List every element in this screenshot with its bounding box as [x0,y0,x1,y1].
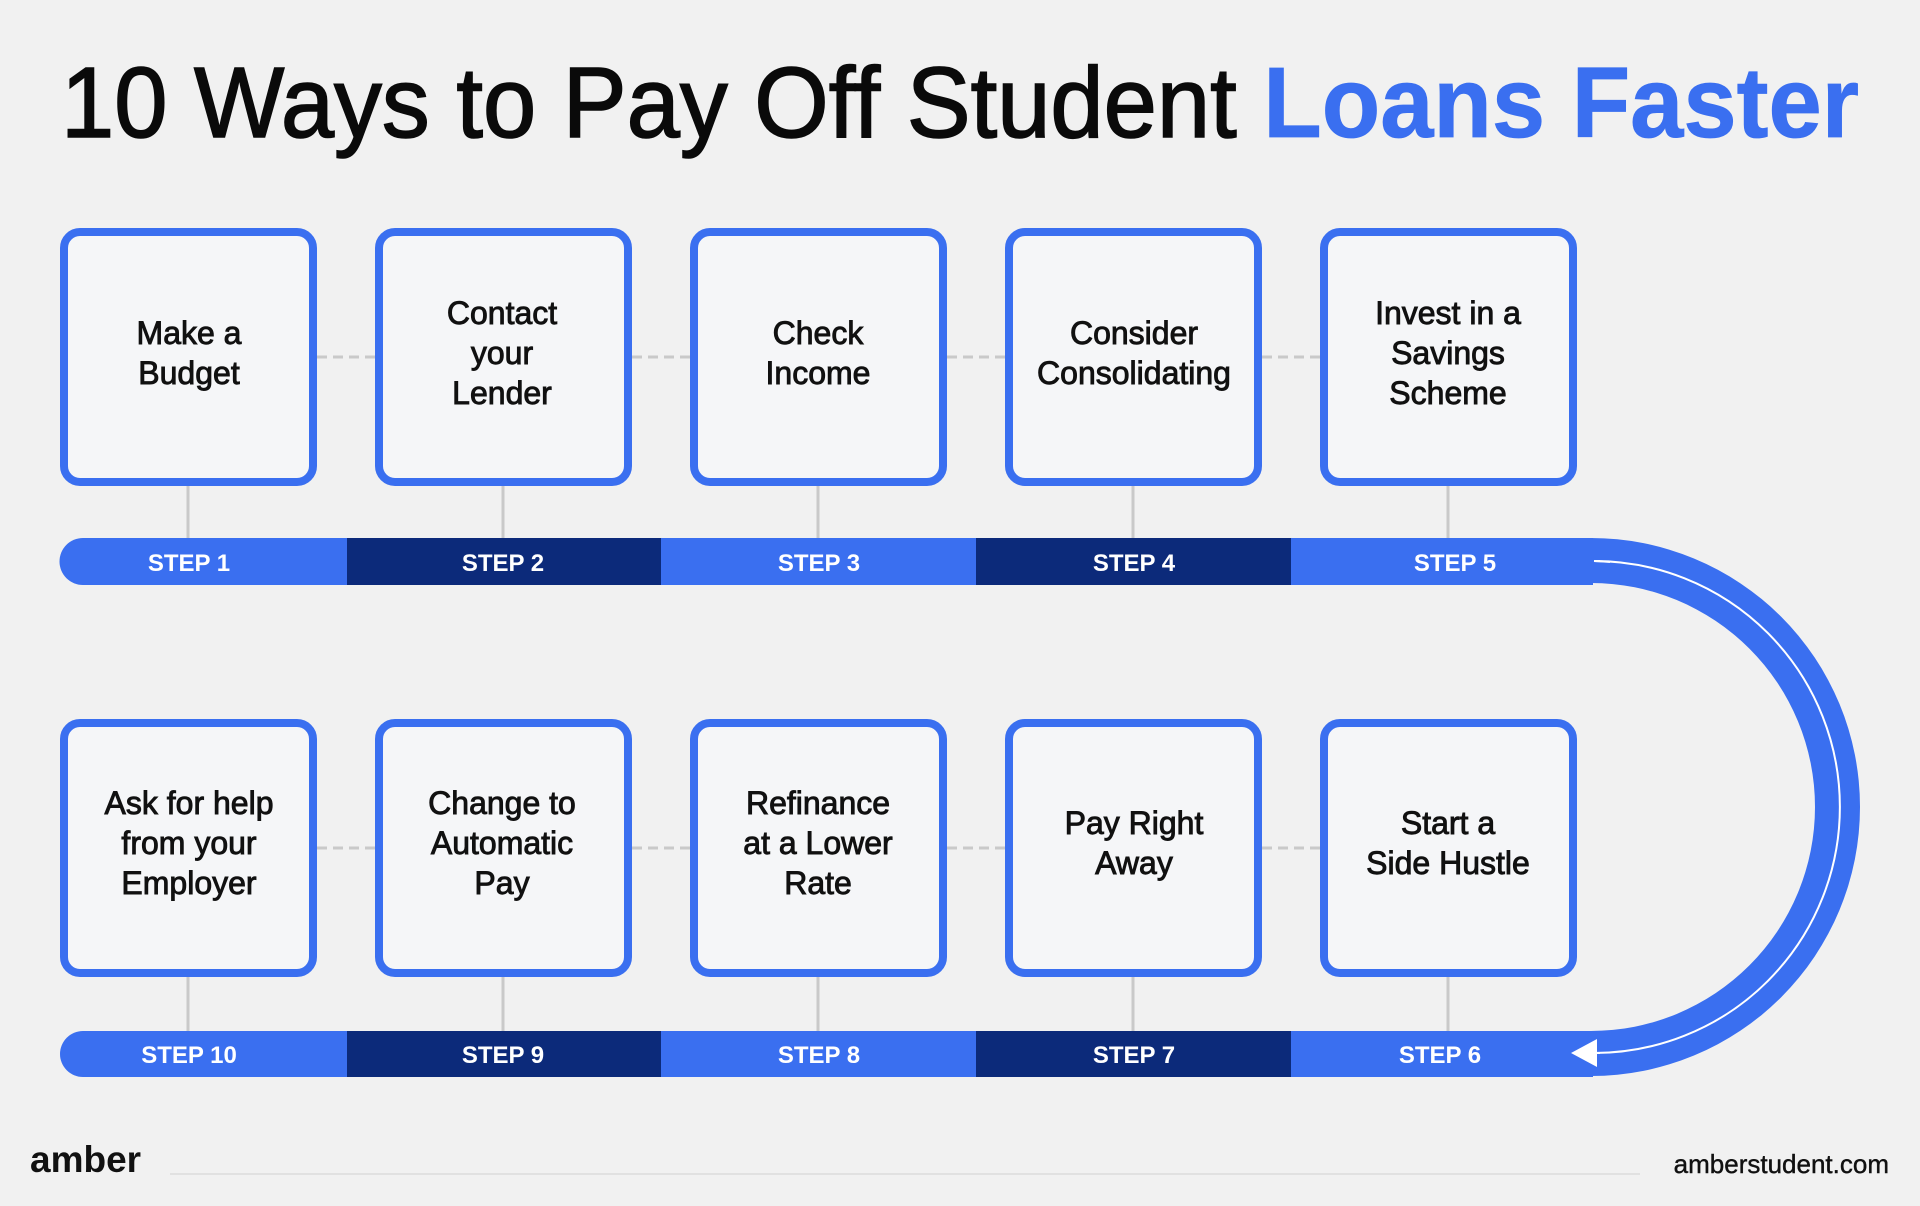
box texts row 2: Pay [474,865,530,901]
connectors [188,357,1448,1031]
box texts row 1: Contact [447,295,557,331]
box texts row 2: Ask for help [105,785,273,821]
box texts row 2: Start a [1401,805,1495,841]
step bar row 1: STEP 2 [462,550,544,577]
box texts row 1: Lender [452,375,552,411]
step bar row 2: STEP 8 [778,1042,860,1069]
step bar row 1: STEP 1 [148,550,230,577]
step bar row 1: STEP 3 [778,550,860,577]
box texts row 2: Change to [428,785,576,821]
box texts row 1: Budget [138,355,240,391]
box texts row 2: Away [1095,845,1173,881]
step bar row 2: STEP 6 [1399,1042,1481,1069]
step bar row 1 [59,538,1610,585]
box texts row 2: Rate [784,865,852,901]
curved arrow connector [1591,538,1860,1076]
boxes row 2 [64,723,1573,973]
box texts row 2: Pay Right [1065,805,1203,841]
box texts row 1: Consider [1070,315,1198,351]
box texts row 1: Consolidating [1037,355,1231,391]
step bar row 1: STEP 4 [1093,550,1176,577]
title: 10 Ways to Pay Off Student Loans Faster [61,47,1859,159]
box texts row 1: Income [766,355,870,391]
box texts row 2: Refinance [746,785,890,821]
step bar row 2: STEP 7 [1093,1042,1175,1069]
step bar row 2: STEP 9 [462,1042,544,1069]
footer line [170,1173,1640,1175]
box texts row 1 [137,295,1521,411]
box texts row 1: Scheme [1389,375,1507,411]
box texts row 2: Employer [121,865,257,901]
footer logo: amber [30,1139,141,1180]
box texts row 1: Savings [1391,335,1505,371]
footer url: amberstudent.com [1674,1149,1889,1179]
box texts row 2: from your [121,825,257,861]
step bar row 2 [60,1031,1600,1077]
box texts row 1: Make a [137,315,242,351]
box texts row 2 [105,785,1530,901]
box texts row 1: Invest in a [1375,295,1521,331]
boxes row 1 [64,232,1573,482]
box texts row 1: Check [773,315,864,351]
box texts row 2: Side Hustle [1366,845,1530,881]
step bar row 1: STEP 5 [1414,550,1496,577]
box texts row 2: at a Lower [743,825,893,861]
step bar row 2: STEP 10 [141,1042,237,1069]
box texts row 2: Automatic [431,825,573,861]
box texts row 1: your [471,335,533,371]
